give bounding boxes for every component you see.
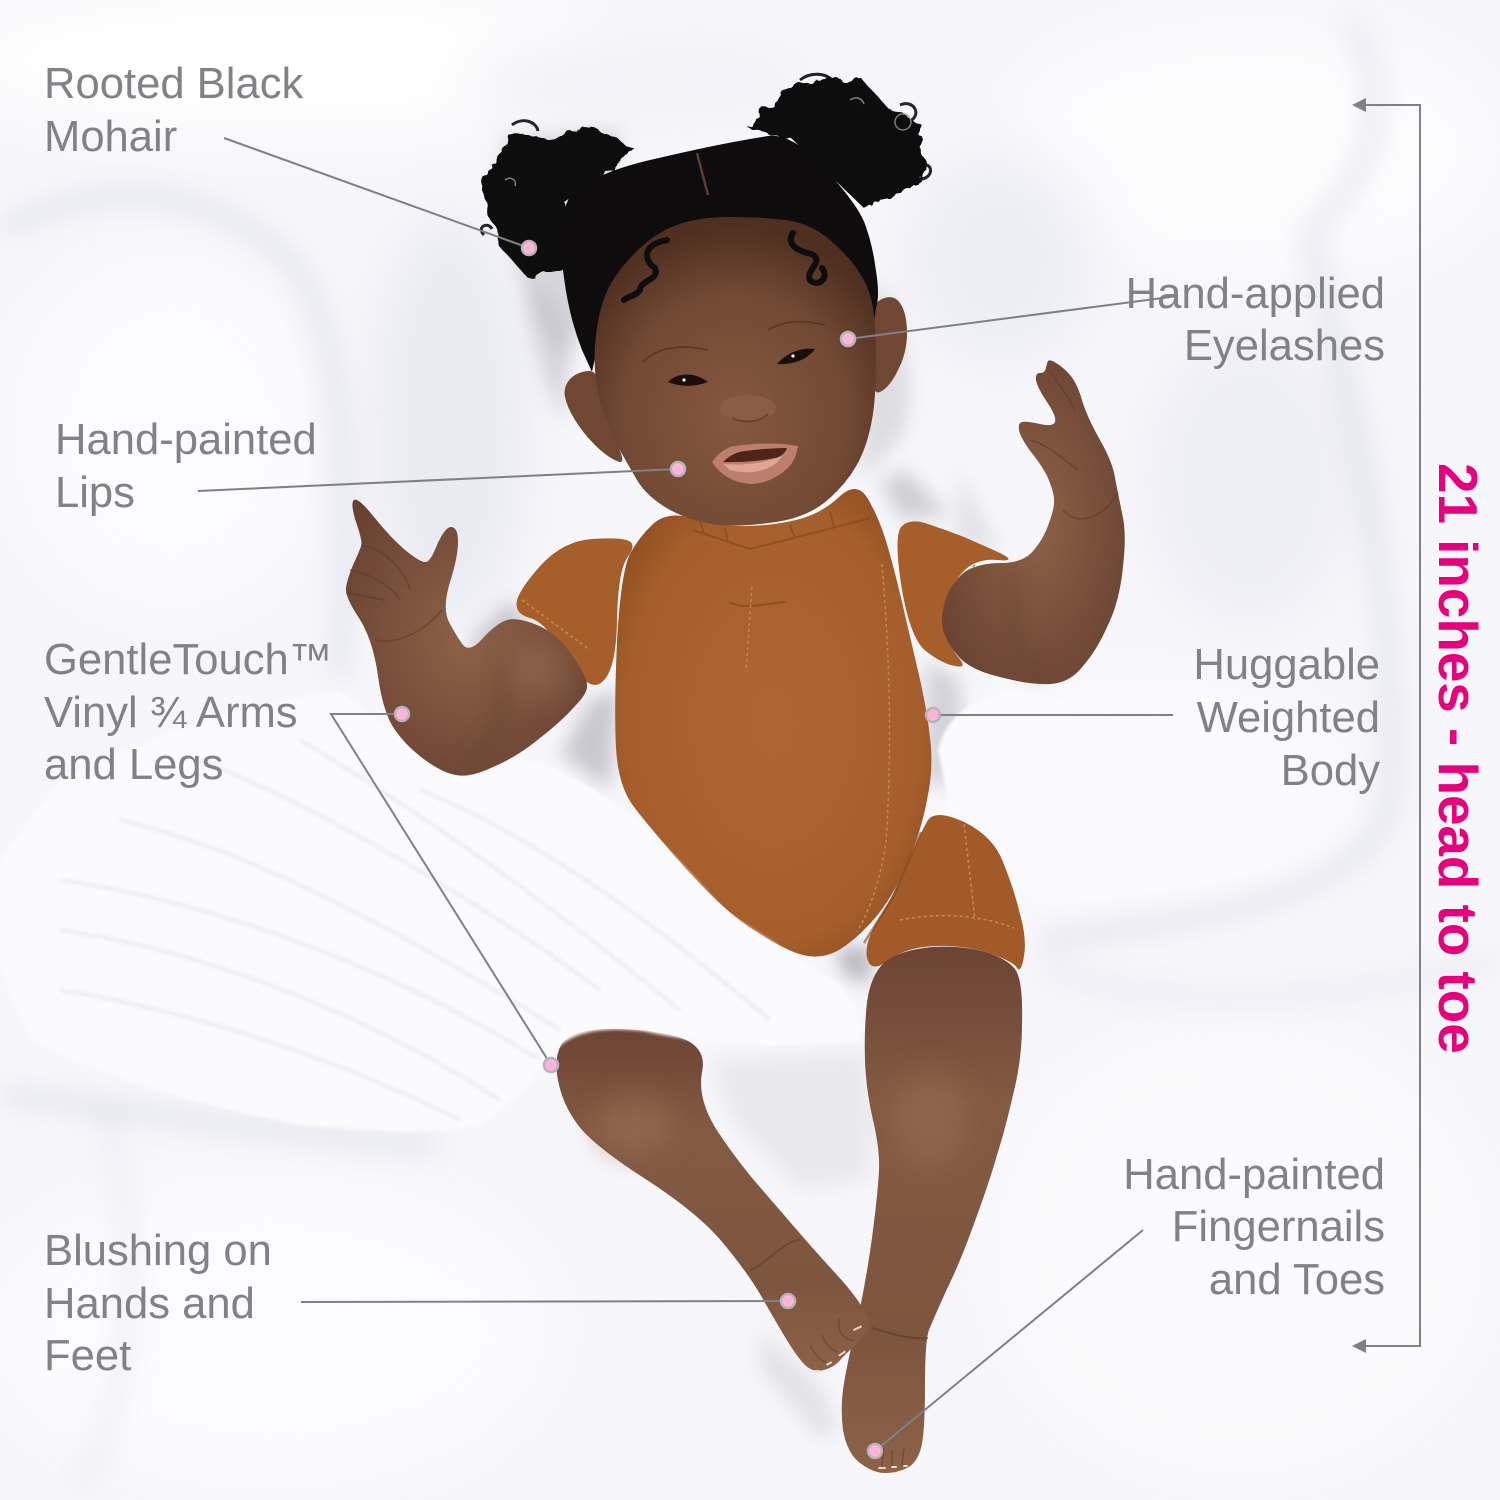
- callout: Hand-painted Fingernails and Toes: [868, 1151, 1385, 1458]
- cloth fold at right of body: [938, 690, 1117, 880]
- doll upper body: [346, 74, 1125, 776]
- doll hair: [481, 74, 930, 372]
- cloth fold over left thigh: [0, 690, 861, 1131]
- doll contact shadows: [470, 130, 1000, 1440]
- callout: Hand-applied Eyelashes: [841, 270, 1385, 370]
- callout: Hand-painted Fingernails and Toes: Fingernails: [1172, 1203, 1385, 1251]
- callout: Hand-painted Lips: Hand-painted: [55, 416, 317, 464]
- doll lower body: [556, 489, 1025, 1473]
- brows: [643, 322, 825, 362]
- doll right arm and hand: [942, 360, 1125, 684]
- doll shorts: [864, 815, 1025, 970]
- callout: Huggable Weighted Body: Weighted: [1197, 694, 1380, 742]
- eyes: [668, 349, 815, 386]
- callout: Blushing on Hands and Feet: Blushing on: [44, 1227, 272, 1275]
- callout: Hand-painted Lips: Lips: [55, 469, 135, 517]
- callout: Hand-painted Fingernails and Toes: and Toes: [1209, 1256, 1385, 1304]
- callout: Hand-painted Fingernails and Toes: Hand-painted: [1123, 1151, 1385, 1199]
- doll sleeves: [517, 521, 1009, 685]
- nose: [720, 395, 776, 421]
- callout: Rooted Black Mohair: Mohair: [44, 113, 177, 161]
- mouth: [712, 444, 798, 484]
- callout: GentleTouch Vinyl Arms and Legs: and Legs: [44, 741, 223, 789]
- callout: GentleTouch Vinyl Arms and Legs: GentleTouch™: [44, 636, 332, 684]
- callout: Blushing on Hands and Feet: Hands and: [44, 1280, 255, 1328]
- callout: Rooted Black Mohair: Rooted Black: [44, 60, 303, 108]
- height label: 21 inches - head to toe: [1427, 463, 1489, 1054]
- callout: Hand-applied Eyelashes: Eyelashes: [1184, 322, 1385, 370]
- doll torso: [615, 489, 931, 957]
- callout: Hand-applied Eyelashes: Hand-applied: [1126, 270, 1385, 318]
- callout: Blushing on Hands and Feet: Feet: [44, 1332, 131, 1380]
- callout: Huggable Weighted Body: Body: [1281, 747, 1380, 795]
- callout: GentleTouch Vinyl Arms and Legs: [44, 636, 558, 1072]
- height dimension arrow: [1352, 98, 1420, 1353]
- callout: GentleTouch Vinyl Arms and Legs: Vinyl ¾ Arms: [44, 689, 298, 737]
- doll left arm and hand: [346, 500, 587, 776]
- callout: Rooted Black Mohair: [44, 60, 536, 255]
- callout: Huggable Weighted Body: Huggable: [1193, 641, 1380, 689]
- doll ears: [565, 297, 907, 462]
- callout: Huggable Weighted Body: [926, 641, 1380, 795]
- callout: Blushing on Hands and Feet: [44, 1227, 795, 1380]
- callout: Hand-painted Lips: [55, 416, 685, 517]
- doll right leg and foot: [842, 947, 1022, 1473]
- doll left leg and foot: [556, 1029, 869, 1372]
- forehead curls: [624, 233, 825, 300]
- doll face: [595, 217, 876, 526]
